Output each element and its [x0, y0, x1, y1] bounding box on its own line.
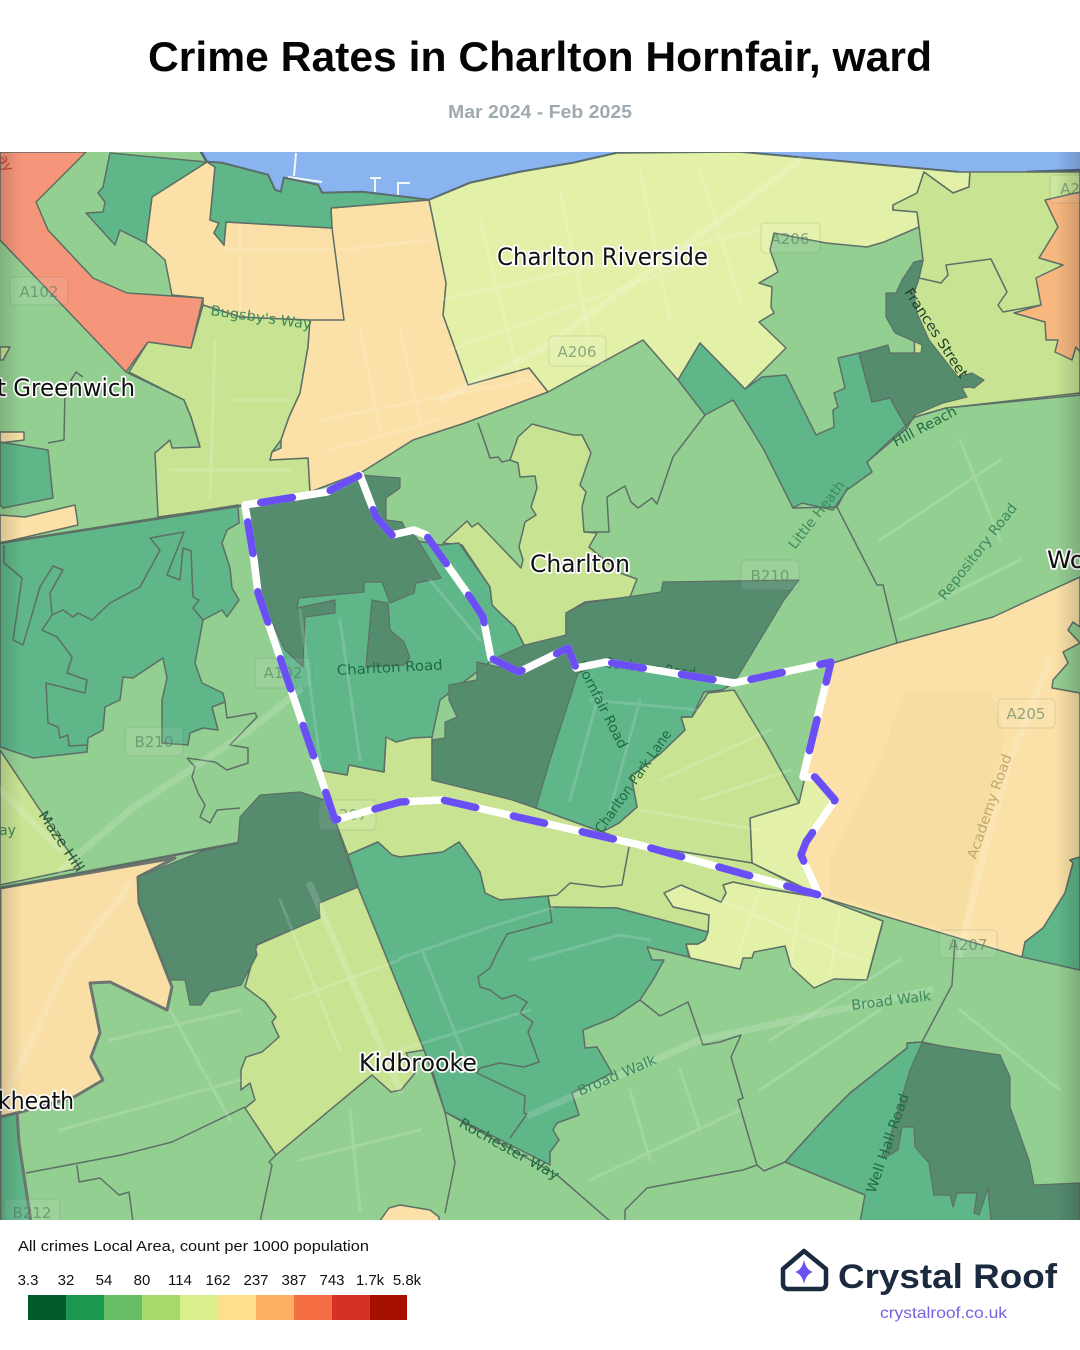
- legend tick labels: 5.8k: [393, 1272, 422, 1289]
- road labels: Charlton Park Lane: [592, 727, 675, 836]
- place names: kheath: [0, 1087, 74, 1115]
- map zones: salmon and orange (high crime): [0, 152, 1080, 372]
- road number badges: A206: [771, 230, 809, 248]
- map zones: peach (elevated crime): [0, 162, 1080, 1222]
- road number badges: A206: [558, 343, 596, 361]
- legend tick labels: 54: [96, 1272, 112, 1289]
- subtitle: date range: Mar 2024 - Feb 2025: [448, 102, 632, 122]
- legend tick labels: 162: [205, 1272, 231, 1289]
- panel: choropleth map: [0, 150, 1080, 1228]
- map edge shading: [0, 152, 1080, 1220]
- legend tick labels: 237: [243, 1272, 269, 1289]
- place names: t Greenwich: [0, 374, 135, 402]
- water: River Thames: [200, 150, 1080, 200]
- map zones: mid green (low crime): [0, 153, 1080, 1222]
- place names: Charlton: [530, 550, 630, 578]
- logo wordmark: Crystal Roof: [838, 1258, 1058, 1296]
- legend: [18, 1238, 422, 1320]
- road labels: Well Hall Road: [864, 1092, 913, 1195]
- road labels: Charlton Road: [336, 657, 443, 679]
- road labels: Academy Road: [965, 752, 1016, 861]
- road number badges: A207: [329, 806, 367, 824]
- legend title: All crimes Local Area, count per 1000 population: [18, 1238, 369, 1255]
- road number badges: [4, 175, 1080, 1228]
- road number badges: A205: [1007, 705, 1045, 723]
- legend colour scale: [28, 1295, 407, 1320]
- legend tick labels: 743: [319, 1272, 345, 1289]
- map zones: pale yellow-green (low-mid crime): [429, 152, 970, 988]
- logo: Crystal Roof: [783, 1251, 1058, 1322]
- road labels: [0, 152, 1021, 1195]
- logo url: crystalroof.co.uk: [880, 1305, 1008, 1322]
- title: Crime Rates in Charlton Hornfair, ward: [148, 33, 932, 80]
- road number badges: B212: [13, 1204, 51, 1222]
- road labels: Broad Walk: [851, 988, 933, 1014]
- road labels: Frances Street: [901, 285, 971, 382]
- place names: Charlton Riverside: [497, 243, 708, 271]
- road labels: Rochester Way: [456, 1116, 562, 1184]
- road labels: Bugsby's Way: [209, 303, 313, 333]
- map: faint road network: [0, 160, 1060, 1210]
- road number badges: A207: [949, 936, 987, 954]
- road number badges: A2: [1060, 180, 1080, 198]
- ward boundary: Charlton Hornfair: [245, 475, 835, 895]
- road labels: Hornfair Road: [572, 659, 630, 751]
- road labels: Broad Walk: [575, 1052, 660, 1100]
- map zones: dark green (lowest crime, translucent): [138, 260, 1080, 1222]
- place names: [0, 243, 1080, 1115]
- road number badges: B210: [135, 733, 173, 751]
- road number badges: B210: [751, 567, 789, 585]
- map zones: yellow-green: [0, 172, 1080, 1155]
- legend tick labels: 3.3: [18, 1272, 38, 1289]
- icon: house with star: [783, 1251, 826, 1289]
- road labels: Maze Hill: [35, 808, 87, 875]
- road number badges: A102: [20, 283, 58, 301]
- road labels: Little Heath: [786, 478, 849, 552]
- legend tick labels: 114: [168, 1272, 192, 1289]
- map: internal zone boundaries: [0, 259, 1080, 1222]
- legend tick labels: 32: [58, 1272, 74, 1289]
- legend tick labels: [18, 1272, 422, 1289]
- place names: Kidbrooke: [359, 1049, 477, 1077]
- legend tick labels: 387: [281, 1272, 307, 1289]
- legend tick labels: 1.7k: [356, 1272, 385, 1289]
- road number badges: A102: [264, 664, 302, 682]
- road labels: Hill Reach: [890, 404, 960, 451]
- road labels: Repository Road: [936, 501, 1021, 603]
- road labels: Canberra Road: [604, 655, 697, 682]
- legend tick labels: 80: [134, 1272, 150, 1289]
